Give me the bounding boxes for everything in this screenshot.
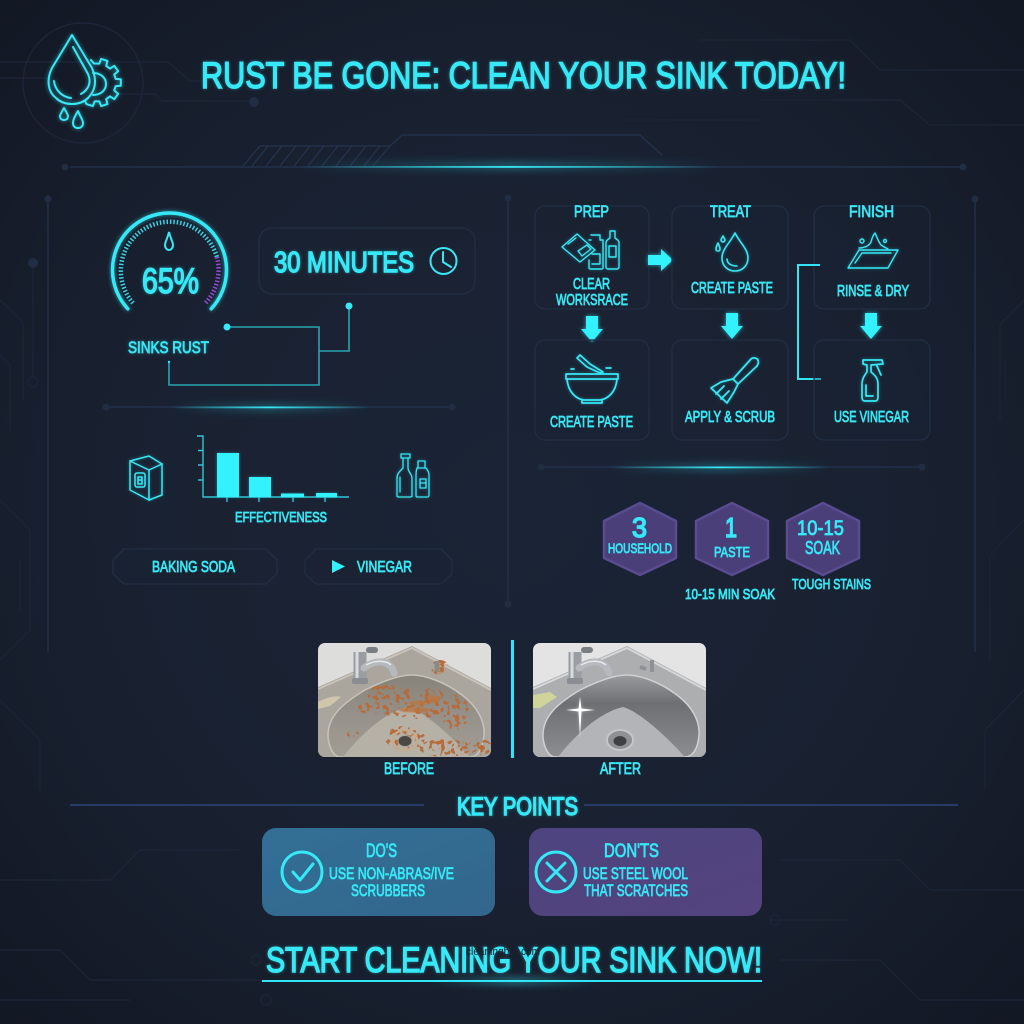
step card: finish, rinse and dry: FINISH <box>849 202 894 221</box>
icon: cross circle <box>536 852 576 892</box>
icon: mixing bowl <box>566 355 618 403</box>
panel: do's: USE NON-ABRAS/IVE <box>329 864 454 883</box>
chip: baking soda: BAKING SODA <box>152 559 236 576</box>
hexagon stat: 3 household: 3 <box>632 512 647 543</box>
title: RUST BE GONE: CLEAN YOUR SINK TODAY! <box>201 55 846 96</box>
panel: do's <box>262 828 495 916</box>
icon: sparkle <box>566 697 595 737</box>
time card: 30 minutes: 30 MINUTES <box>274 247 414 279</box>
panel: don'ts <box>529 828 762 916</box>
hexagon stat: 1 paste: PASTE <box>714 544 750 561</box>
after photo: clean sink <box>533 643 706 757</box>
chip: baking soda <box>113 549 277 584</box>
icon: spray bottle <box>862 360 883 401</box>
step card: prep, clear workspace <box>535 202 649 309</box>
hexagon stat: 10-15 soak: 10-15 <box>797 517 844 540</box>
label: sinks rust: SINKS RUST <box>128 338 209 357</box>
step card: use vinegar: USE VINEGAR <box>834 409 909 426</box>
icon: check circle <box>282 852 322 892</box>
gauge value: 65% <box>142 262 199 301</box>
header decoration <box>62 135 966 170</box>
hexagon stat: 10-15 soak <box>787 503 859 575</box>
icon: water drops <box>716 233 748 271</box>
hexagon stat: 1 paste: 1 <box>725 512 737 543</box>
step card: create paste: CREATE PASTE <box>550 414 633 431</box>
hexagon stat: 3 household: HOUSEHOLD <box>608 541 672 556</box>
step card: finish, rinse and dry: RINSE & DRY <box>837 283 909 300</box>
icon: rinsing sink <box>848 233 898 268</box>
icon: play triangle <box>332 560 345 573</box>
step card: finish, rinse and dry <box>814 202 930 309</box>
frame lines <box>44 194 978 652</box>
rust stains <box>347 660 492 757</box>
before photo: rusty sink <box>318 643 492 757</box>
panel: don'ts: THAT SCRATCHES <box>584 881 688 900</box>
hexagon stat: 1 paste <box>696 503 768 575</box>
call to action: START CLEANING YOUR SINK NOW! <box>266 941 762 980</box>
logo icon: water drop and gear <box>23 23 143 143</box>
arrow: prep to treat <box>648 249 673 271</box>
step card: treat, create paste <box>672 202 788 309</box>
step card: treat, create paste: TREAT <box>710 202 751 221</box>
icon: cloth and bottles <box>562 231 619 269</box>
heading: key points: KEY POINTS <box>457 793 578 821</box>
panel: do's: SCRUBBERS <box>351 881 425 900</box>
divider between photos <box>511 640 514 758</box>
panel: do's: DO'S <box>366 840 397 862</box>
step card: prep, clear workspace: WORKSRACE <box>556 292 628 309</box>
panel: don'ts: DON'TS <box>604 840 659 862</box>
icon: baking soda box <box>130 456 162 500</box>
arrow: treat down <box>721 313 743 339</box>
label: before: BEFORE <box>384 759 434 778</box>
time card: 30 minutes <box>259 228 475 294</box>
icon: gauge drop <box>165 232 173 250</box>
chip: vinegar <box>305 549 452 584</box>
hexagon stat: 10-15 soak: SOAK <box>805 538 840 558</box>
right divider <box>538 464 926 471</box>
bracket connector <box>798 265 821 379</box>
step card: use vinegar <box>814 340 930 440</box>
bar chart: effectiveness <box>197 436 349 526</box>
caption: tough stains: TOUGH STAINS <box>792 577 871 593</box>
icon: vinegar bottles <box>397 454 429 497</box>
step card: apply and scrub <box>672 340 788 440</box>
step card: prep, clear workspace: PREP <box>574 202 609 221</box>
label: after: AFTER <box>600 759 641 778</box>
panel: don'ts: USE STEEL WOOL <box>583 864 688 883</box>
caption: 10-15 min soak: 10-15 MIN SOAK <box>685 587 775 603</box>
chart label: EFFECTIVENESS <box>235 509 327 526</box>
left divider <box>102 404 456 411</box>
gauge: 65% sinks rust <box>113 213 226 309</box>
hexagon stat: 3 household <box>604 503 676 575</box>
step card: prep, clear workspace: CLEAR <box>573 276 610 293</box>
icon: clock <box>430 248 456 274</box>
arrow: finish down <box>860 313 882 339</box>
arrow: prep down <box>581 316 603 342</box>
step card: apply and scrub: APPLY & SCRUB <box>685 409 775 426</box>
icon: brush <box>711 358 758 403</box>
chip: vinegar: VINEGAR <box>357 559 412 576</box>
connector lines <box>168 302 352 385</box>
step card: create paste <box>535 340 649 440</box>
step card: treat, create paste: CREATE PASTE <box>691 280 773 297</box>
watermark: cleaningbro.com <box>466 946 540 958</box>
